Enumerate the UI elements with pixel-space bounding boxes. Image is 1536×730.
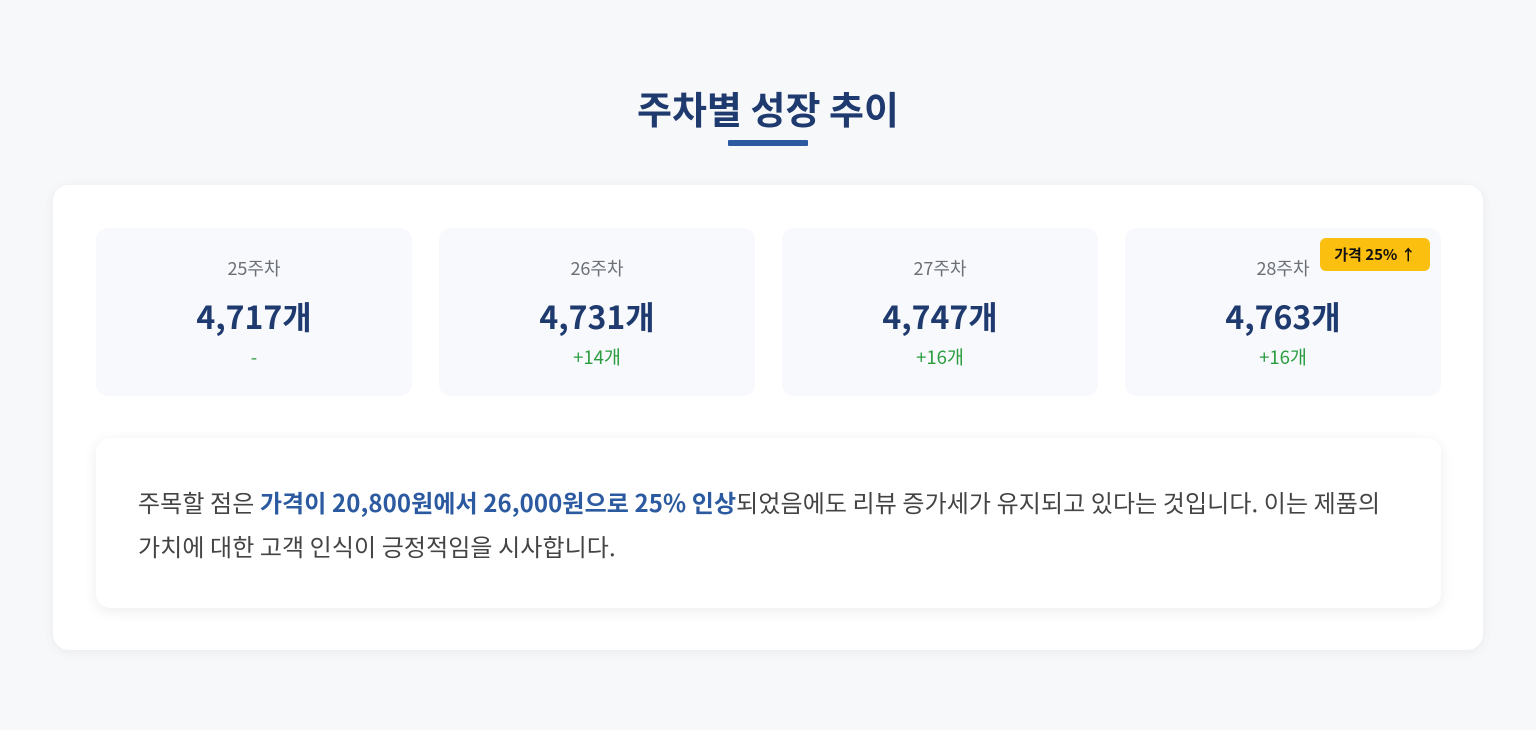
stat: week 25: - bbox=[251, 344, 257, 370]
badge: price up bbox=[1320, 238, 1430, 271]
stat: week 27: 4,747개 bbox=[882, 293, 998, 339]
stat: week 26: 4,731개 bbox=[539, 293, 655, 339]
stat: week 27 bbox=[782, 228, 1098, 396]
title: 주차별 성장 추이 bbox=[637, 80, 899, 135]
stat: week 27: 27주차 bbox=[913, 255, 967, 281]
stat: week 25: 25주차 bbox=[227, 255, 281, 281]
callout: insight text: 주목할 점은 가격이 20,800원에서 26,000원으로 25% 인상되었음에도 리뷰 증가세가 유지되고 있다는 것입니다. 이는 제품의 bbox=[138, 484, 1380, 519]
stat: week 27: +16개 bbox=[916, 344, 964, 370]
title underline bbox=[728, 140, 808, 146]
panel: weekly stats bbox=[53, 185, 1483, 650]
stat: week 28 bbox=[1125, 228, 1441, 396]
stat: week 25 bbox=[96, 228, 412, 396]
stat: week 26: +14개 bbox=[573, 344, 621, 370]
stat: week 26: 26주차 bbox=[570, 255, 624, 281]
stat: week 28: +16개 bbox=[1259, 344, 1307, 370]
stat: week 28: 28주차 bbox=[1256, 255, 1310, 281]
stat: week 25: 4,717개 bbox=[196, 293, 312, 339]
callout: insight text bbox=[96, 438, 1441, 608]
stat: week 26 bbox=[439, 228, 755, 396]
badge: price up: 가격 25% ↑ bbox=[1334, 244, 1416, 265]
callout: insight text: 가치에 대한 고객 인식이 긍정적임을 시사합니다. bbox=[138, 528, 616, 563]
stat: week 28: 4,763개 bbox=[1225, 293, 1341, 339]
